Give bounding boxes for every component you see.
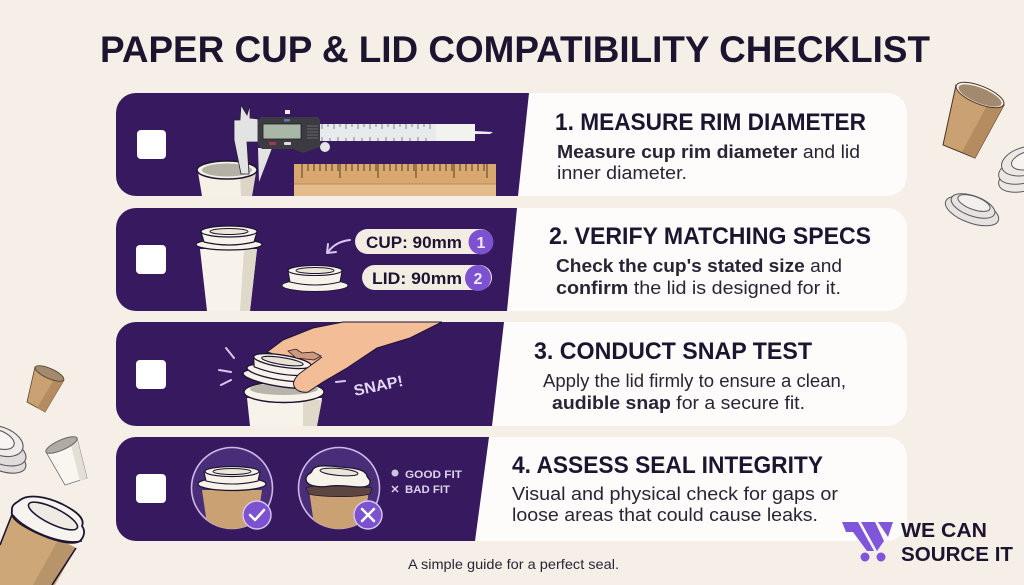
label: cup size: CUP: 90mm xyxy=(366,234,462,252)
checkbox 3 xyxy=(136,360,166,389)
step 2 description xyxy=(556,255,842,298)
arrow: cup label to lid xyxy=(327,240,350,253)
decoration: large kraft cup bottom left xyxy=(0,497,84,585)
title: PAPER CUP & LID COMPATIBILITY CHECKLIST xyxy=(100,29,930,70)
step 2 description: confirm the lid is designed for it. xyxy=(556,277,841,298)
label: lid size: 2 xyxy=(474,271,483,288)
panel: step 2 verify matching specs xyxy=(116,208,907,311)
label: lid size xyxy=(362,265,492,291)
checkbox 4 xyxy=(136,474,166,503)
panel: step 4 assess seal integrity xyxy=(116,437,907,541)
decoration: kraft cup top right xyxy=(943,77,1007,158)
decoration: white cup left xyxy=(44,434,87,485)
footer caption: A simple guide for a perfect seal. xyxy=(408,556,619,572)
label: lid size: LID: 90mm xyxy=(372,270,462,288)
logo: we can source it xyxy=(842,519,1013,566)
step 4 description: Visual and physical check for gaps or xyxy=(512,483,838,504)
label: cup size xyxy=(355,229,494,254)
logo text: SOURCE IT xyxy=(901,543,1013,566)
label: snap: SNAP! xyxy=(352,373,405,400)
panel: step 1 measure rim diameter xyxy=(116,93,907,196)
step 3 description: audible snap for a secure fit. xyxy=(552,392,805,413)
step 3 description xyxy=(543,370,846,413)
illustration: cup with lid xyxy=(196,226,262,311)
step 3 heading: 3. CONDUCT SNAP TEST xyxy=(534,338,812,365)
step 2 description: Check the cup's stated size and xyxy=(556,255,842,276)
decoration: lids left edge xyxy=(0,420,30,479)
illustration: hand palm xyxy=(267,322,442,382)
step 4 description: loose areas that could cause leaks. xyxy=(512,504,818,525)
illustration: bad fit cup xyxy=(298,448,382,529)
illustration: loose lid xyxy=(282,266,348,292)
illustration: lid pressed on xyxy=(242,349,320,392)
icon: cross badge xyxy=(354,501,382,529)
illustration: digital caliper xyxy=(234,105,493,182)
step 4 description xyxy=(512,483,838,525)
decoration: lids right edge xyxy=(996,141,1024,197)
label: cup size: 1 xyxy=(477,235,486,252)
illustration: good fit cup xyxy=(192,448,272,529)
illustration: ruler xyxy=(294,164,496,196)
illustration: cup being measured xyxy=(197,161,257,196)
step 4 heading: 4. ASSESS SEAL INTEGRITY xyxy=(512,452,823,479)
step 2 heading: 2. VERIFY MATCHING SPECS xyxy=(549,223,871,250)
icon: check badge xyxy=(243,501,271,529)
step 1 description xyxy=(557,141,860,183)
decoration: small kraft cup left xyxy=(27,363,66,412)
legend: good and bad fit xyxy=(392,469,462,496)
panel: step 3 conduct snap test xyxy=(116,322,907,426)
step 1 description: Measure cup rim diameter and lid xyxy=(557,141,860,162)
icon: snap burst lines xyxy=(219,348,345,385)
step 1 heading: 1. MEASURE RIM DIAMETER xyxy=(555,109,866,136)
logo text: WE CAN xyxy=(901,519,987,542)
logo text xyxy=(901,519,1013,566)
step 1 description: inner diameter. xyxy=(557,162,687,183)
illustration: fingers and thumb xyxy=(288,349,347,392)
decoration: lid right xyxy=(942,189,1002,232)
logo mark xyxy=(842,522,893,562)
legend: good and bad fit: GOOD FIT xyxy=(405,469,462,481)
step 3 description: Apply the lid firmly to ensure a clean, xyxy=(543,370,846,391)
legend: good and bad fit: BAD FIT xyxy=(405,484,450,496)
illustration: cup under test xyxy=(244,382,324,426)
checkbox 1 xyxy=(137,130,166,159)
checkbox 2 xyxy=(136,245,166,274)
